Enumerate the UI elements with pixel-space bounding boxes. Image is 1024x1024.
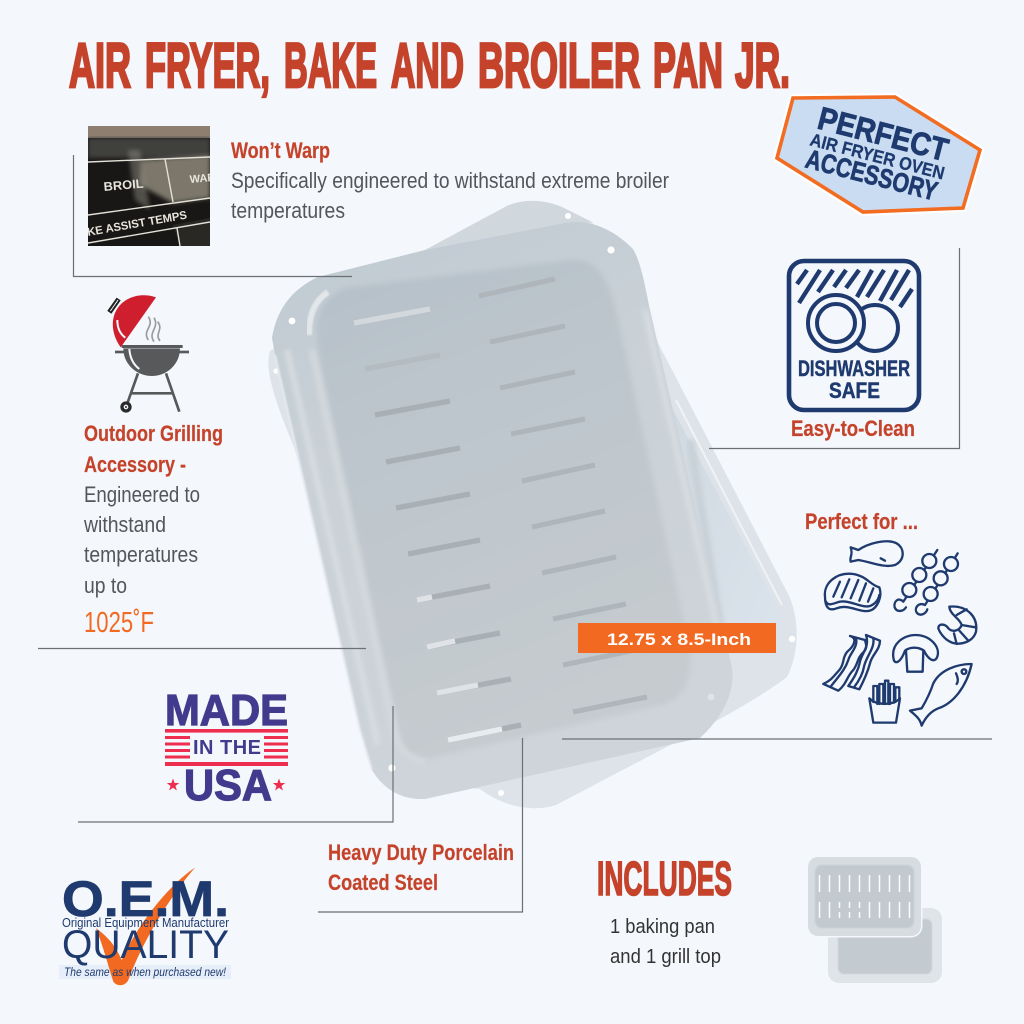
size label (578, 623, 776, 653)
badge: perfect air fryer oven accessory: ACCESSORY (802, 144, 941, 207)
badge: perfect air fryer oven accessory: AIR FRYER OVEN (808, 130, 947, 183)
heavy duty porcelain text: Heavy Duty Porcelain (328, 840, 514, 865)
won't warp text: Specifically engineered to withstand extreme broiler (231, 168, 669, 193)
outdoor grilling text: Accessory - (84, 452, 186, 477)
oem quality logo: Original Equipment Manufacturer (62, 916, 229, 930)
includes text: 1 baking pan (610, 916, 715, 938)
outdoor grilling text: temperatures (84, 542, 198, 567)
includes text: and 1 grill top (610, 946, 721, 968)
photo: oven broil panel: WAR (189, 172, 216, 186)
perfect for heading: Perfect for ... (805, 509, 918, 534)
photo: oven broil panel: BROIL (103, 177, 144, 194)
oem quality logo: O.E.M. (62, 871, 229, 927)
title: PAN (653, 31, 723, 101)
outdoor grilling text (83, 421, 223, 639)
outdoor grilling text: 1025˚F (84, 607, 154, 639)
title (69, 31, 790, 101)
made in the usa logo: USA (184, 761, 272, 810)
badge: perfect air fryer oven accessory (777, 97, 980, 212)
hero product: broiler pan and grill top (268, 201, 797, 808)
photo: oven broil panel: KE ASSIST TEMPS (86, 210, 188, 239)
icon: outdoor grill (109, 295, 189, 412)
made in the usa logo (165, 686, 288, 810)
outdoor grilling text: Outdoor Grilling (84, 421, 223, 446)
title: AIR (69, 31, 131, 101)
right row of slots (479, 279, 647, 712)
outdoor grilling text: Engineered to (84, 482, 200, 507)
back baking pan (268, 201, 797, 808)
won't warp text (231, 138, 669, 223)
title: FRYER, (145, 31, 270, 101)
includes heading: INCLUDES (597, 853, 732, 906)
oem quality logo (59, 868, 231, 985)
icon: dishwasher safe: DISHWASHER (798, 356, 910, 381)
outdoor grilling text: withstand (83, 512, 166, 537)
title: BAKE (284, 31, 377, 101)
title: AND (391, 31, 464, 101)
front grill top (272, 222, 733, 799)
icon: dishwasher safe: SAFE (829, 378, 880, 403)
won't warp text: Won’t Warp (231, 138, 330, 163)
heavy duty porcelain text: Coated Steel (328, 870, 438, 895)
icons: foods (823, 541, 976, 726)
easy-to-clean label: Easy-to-Clean (791, 416, 915, 441)
won't warp text: temperatures (231, 198, 345, 223)
outdoor grilling text: up to (84, 573, 127, 598)
oem quality logo: The same as when purchased new! (64, 967, 227, 979)
oem quality logo: QUALITY (62, 923, 229, 967)
title: BROILER (478, 31, 640, 101)
includes text (610, 916, 721, 968)
badge: perfect air fryer oven accessory: PERFECT (814, 100, 952, 168)
title: JR. (735, 31, 790, 101)
leader lines (38, 155, 992, 912)
made in the usa logo: IN THE (193, 737, 261, 759)
thumbnail: pan and grill top (808, 857, 942, 983)
size label: 12.75 x 8.5-Inch (607, 630, 751, 649)
heavy duty porcelain text (328, 840, 514, 895)
icon: dishwasher safe (789, 261, 919, 410)
left row of slots (354, 309, 521, 740)
made in the usa logo: MADE (165, 686, 288, 735)
photo: oven broil panel (86, 126, 216, 246)
